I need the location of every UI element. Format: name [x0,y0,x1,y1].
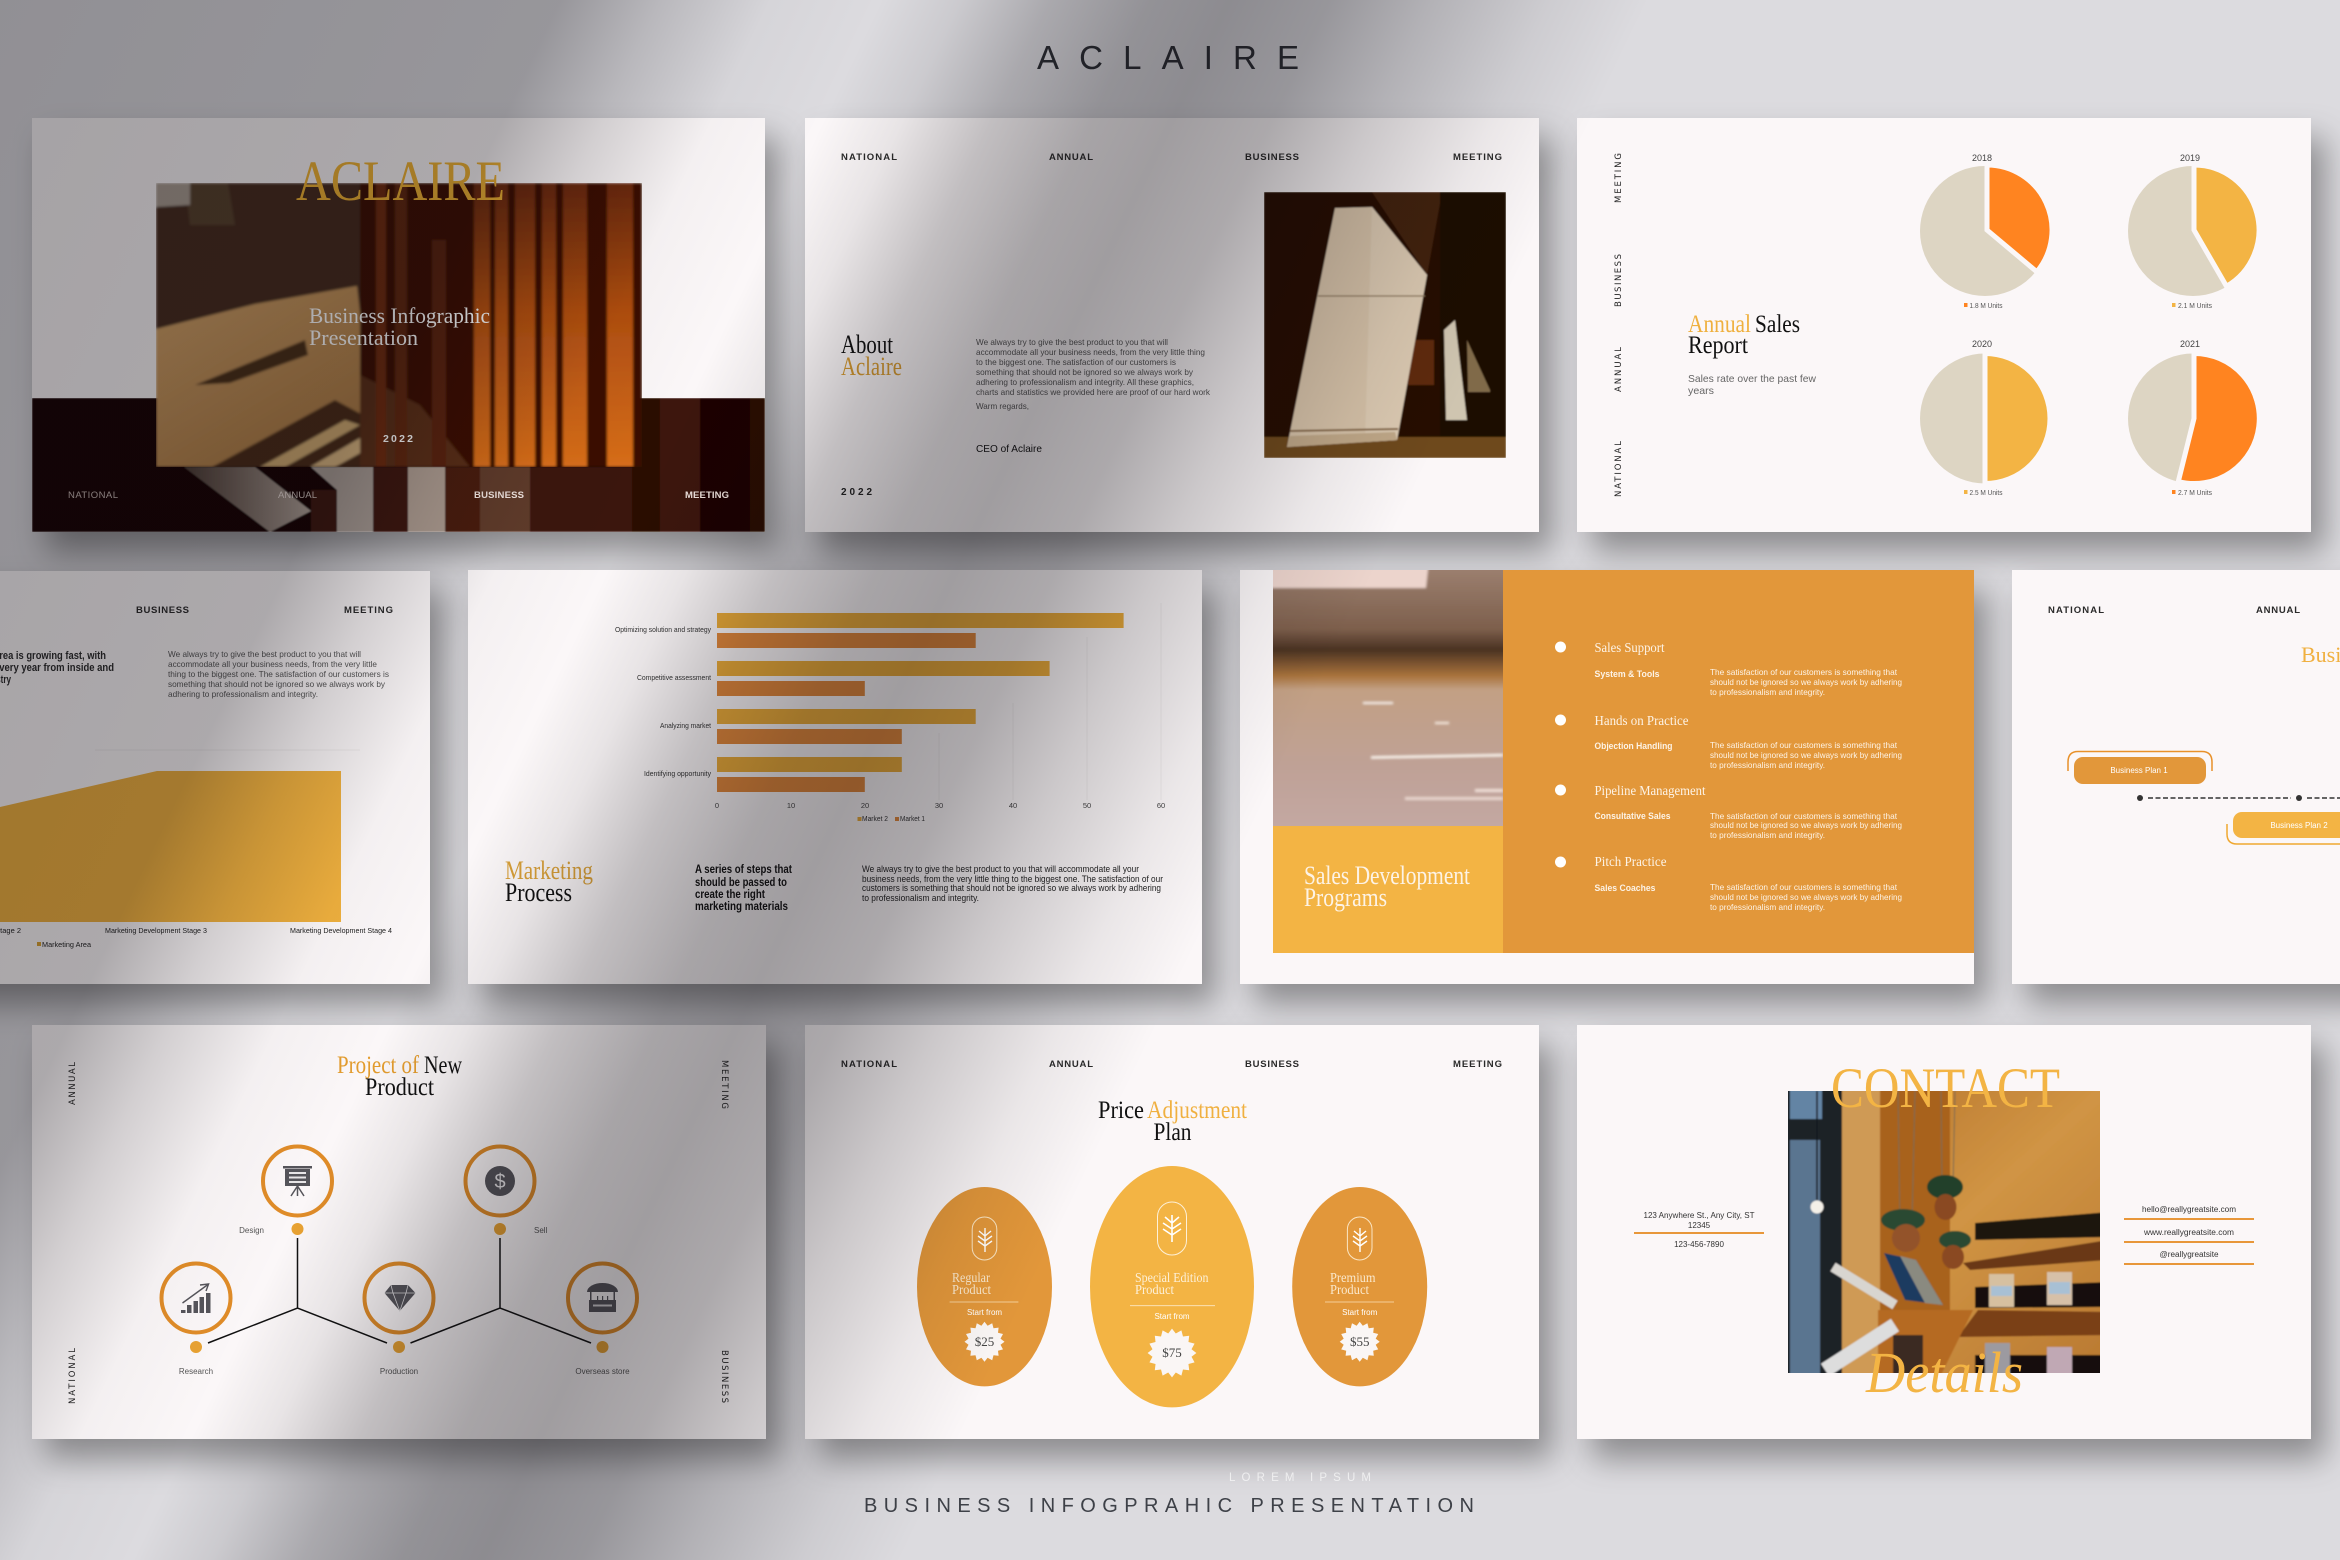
panel: about [805,118,1539,532]
nav labels: NATIONAL [2048,605,2104,616]
signature: CEO of Aclaire [976,443,1042,455]
vertical nav labels: ANNUAL [1614,347,1624,392]
program item 1: should not be ignored so we always work by adhering [1710,677,1902,687]
program item 2: The satisfaction of our customers is something that [1710,740,1898,750]
panel: marketing area chart [0,571,430,984]
price card: premium: Product [1330,1283,1369,1298]
process lead text [695,862,792,913]
vertical nav labels: NATIONAL [68,1348,78,1404]
process lead text: should be passed to [695,875,787,889]
nav labels: BUSINESS [136,605,189,616]
nav labels: BUSINESS [1245,1059,1299,1070]
body text: accommodate all your business needs, from the very little [168,659,377,669]
nav labels [841,1059,1502,1070]
contact heading: CONTACT [1831,1057,2060,1120]
program item 1: The satisfaction of our customers is something that [1710,667,1898,677]
panel: price adjustment plan [805,1025,1539,1439]
report description [1688,373,1816,397]
price card: premium: $55 [1350,1334,1369,1349]
nav labels: NATIONAL [841,1059,897,1070]
program item 3: The satisfaction of our customers is something that [1710,811,1898,821]
online contacts: @reallygreatsite [2160,1250,2219,1259]
price card: special edition: Start from [1154,1312,1190,1321]
bar chart: 40 [1009,801,1017,810]
cover nav labels [68,490,729,501]
business plan 1 [2068,752,2212,784]
pie chart 2019: 2.1 M Units [2178,303,2212,310]
panel: business plan timeline [2012,570,2340,984]
program item 1: Sales Support [1594,640,1665,655]
about text: charts and statistics we provided here are proof of our hard work [976,387,1211,397]
process body text: We always try to give the best product to you that will accommodate all your [862,864,1139,875]
bar chart: Analyzing market [660,721,711,730]
nav labels: ANNUAL [2256,605,2300,616]
body text: We always try to give the best product to you that will [168,649,361,659]
step: design: Design [239,1226,264,1235]
price card: special edition: $75 [1162,1345,1182,1360]
online contacts: www.reallygreatsite.com [2143,1228,2234,1237]
online contacts [2124,1205,2254,1265]
body text: thing to the biggest one. The satisfaction of our customers is [168,669,389,679]
pie chart 2018 [1920,153,2052,310]
details heading: Details [1865,1340,2023,1405]
bar chart: 0 [715,801,719,810]
about text: adhering to professionalism and integrity. All these graphics, [976,377,1194,387]
report heading: Annual [1688,311,1751,338]
yellow title block [1273,826,1503,953]
step: research: Research [179,1367,213,1376]
process lead text: marketing materials [695,899,788,913]
about text: something that should not be ignored so we always work by [976,367,1194,377]
chart axis labels [0,926,392,935]
price card: regular: $25 [975,1334,994,1349]
step: research [162,1264,230,1376]
program item 2: to professionalism and integrity. [1710,760,1825,770]
pie chart 2021: 2.7 M Units [2178,490,2212,497]
hallway photo [1273,570,1503,826]
body text [168,649,389,699]
programs title: Programs [1304,883,1387,912]
process body text: to professionalism and integrity. [862,893,979,904]
price card: premium: Premium [1330,1271,1376,1286]
address block [1634,1211,1764,1249]
bar chart: 10 [787,801,795,810]
process body text: customers is something that should not be ignored so we always work by adhering [862,883,1161,894]
vertical nav labels: BUSINESS [719,1350,729,1403]
price card: special edition [1090,1166,1254,1407]
bar chart: Market 1 [900,816,925,823]
panel: sales development programs [1240,560,1974,984]
contact photo [1780,1085,2108,1381]
cover nav labels: ANNUAL [278,490,317,501]
project heading: New [424,1052,462,1079]
about text: to the biggest one. The satisfaction of our customers is [976,357,1176,367]
price card: regular: Regular [952,1271,990,1286]
address block: 12345 [1688,1221,1711,1230]
address block: 123 Anywhere St., Any City, ST [1644,1211,1755,1220]
price card: special edition: Product [1135,1283,1174,1298]
nav labels: NATIONAL [841,152,897,163]
about text: accommodate all your business needs, from the very little thing [976,347,1205,357]
cover nav labels: NATIONAL [68,490,118,501]
panel: marketing process [468,570,1202,984]
price heading: Plan [1154,1119,1192,1146]
process heading [505,856,593,907]
pie chart 2019 [2128,153,2259,310]
process lead text: create the right [695,887,765,901]
process body text: business needs, from the very little thing to the biggest one. The satisfaction of our [862,874,1163,885]
online contacts: hello@reallygreatsite.com [2142,1205,2236,1214]
program item 4: Sales Coaches [1594,883,1656,894]
area chart [0,771,341,922]
body text: something that should not be ignored so we always work by [168,679,386,689]
bar chart: 50 [1083,801,1091,810]
programs title: Sales Development [1304,861,1471,890]
connector lines [208,1238,591,1343]
icon: leaf [1353,1228,1367,1252]
intro text [0,650,114,686]
nav labels: ANNUAL [1049,152,1093,163]
icon: leaf [978,1228,992,1252]
bar chart: 60 [1157,801,1165,810]
process body text [862,864,1163,904]
about heading: About [841,330,894,359]
price card: special edition: Special Edition [1135,1271,1208,1286]
report heading: Report [1688,332,1748,359]
vertical nav labels: BUSINESS [1614,254,1624,307]
bar chart: 30 [935,801,943,810]
bar chart: 20 [861,801,869,810]
about text [976,337,1211,411]
lorem ipsum caption: LOREM IPSUM [1229,1472,1371,1484]
title: ACLAIRE [1037,39,1299,76]
bar chart: Competitive assessment [637,673,711,682]
program item 2: Hands on Practice [1594,713,1689,728]
price heading [1098,1097,1247,1146]
about photo [1264,192,1506,458]
nav labels [136,605,393,616]
process heading: Process [505,878,572,907]
cover subtitle: Presentation [309,325,418,350]
chart axis labels: Marketing Development Stage 3 [105,926,207,935]
icon: presentation board [283,1166,312,1196]
program item 4 [1555,854,1902,912]
business plan 2 [2227,812,2340,844]
project heading [337,1052,462,1101]
footer subtitle: BUSINESS INFOGPRAHIC PRESENTATION [864,1495,1474,1517]
about heading [841,330,902,381]
step: production [364,1264,434,1376]
orange content block [1503,570,1974,953]
program item 3: Pipeline Management [1594,783,1706,798]
program item 3 [1555,783,1902,840]
nav labels [841,152,1502,163]
cover nav labels: MEETING [685,490,729,501]
cover heading: ACLAIRE [296,150,505,213]
cover subtitle [309,303,490,350]
bottom photo strip [32,398,765,532]
nav labels: BUSINESS [1245,152,1299,163]
about heading: Aclaire [841,352,902,381]
program item 3: to professionalism and integrity. [1710,830,1825,840]
programs title [1304,861,1471,912]
step: overseas store: Overseas store [575,1367,630,1376]
timeline connector [2137,795,2340,801]
chart axis labels: Marketing Development Stage 4 [290,926,392,935]
program item 1: to professionalism and integrity. [1710,687,1825,697]
panel: project of new product [32,1025,766,1439]
about text: Warm regards, [976,401,1029,411]
price card: regular [917,1187,1052,1386]
program item 1 [1555,640,1902,697]
pie chart 2018: 2018 [1972,153,1992,163]
bar chart: Identifying opportunity [644,769,711,778]
program item 4: should not be ignored so we always work by adhering [1710,892,1902,902]
pie chart 2021: 2021 [2180,339,2200,349]
panel: contact details [1577,1025,2311,1439]
cover year: 2022 [383,433,413,445]
program item 4: Pitch Practice [1594,854,1666,869]
cover subtitle: Business Infographic [309,303,490,328]
pie chart 2019: 2019 [2180,153,2200,163]
address block: 123-456-7890 [1674,1240,1724,1249]
price card: regular: Start from [967,1308,1002,1317]
vertical nav labels: MEETING [719,1060,729,1109]
price heading: Price [1098,1097,1144,1124]
pie chart 2021 [2128,339,2259,497]
bar chart [615,613,1165,823]
program item 4: The satisfaction of our customers is something that [1710,882,1898,892]
price card: regular: Product [952,1283,991,1298]
price heading: Adjustment [1147,1097,1247,1124]
icon: dollar coin: $ [494,1171,506,1193]
pie chart 2020: 2.5 M Units [1970,490,2003,497]
about text: We always try to give the best product to you that will [976,337,1168,347]
icon: leaf [1163,1215,1181,1242]
pie chart 2018: 1.8 M Units [1970,303,2003,310]
year: 2022 [841,487,872,498]
body text: adhering to professionalism and integrity. [168,689,318,699]
vertical nav labels: ANNUAL [68,1062,78,1105]
nav labels: MEETING [344,605,393,616]
program item 2: Objection Handling [1594,741,1673,752]
report description: years [1688,385,1714,397]
program item 3: Consultative Sales [1594,811,1670,822]
step: design [239,1146,332,1235]
step: production: Production [380,1367,418,1376]
vertical nav labels [1614,153,1624,497]
nav labels: MEETING [1453,1059,1502,1070]
step: overseas store [568,1264,637,1376]
program item 1: System & Tools [1594,669,1660,680]
vertical nav labels: NATIONAL [1614,441,1624,497]
price card: premium [1292,1187,1427,1386]
program item 3: should not be ignored so we always work by adhering [1710,820,1902,830]
pie chart 2020 [1920,339,2050,497]
nav labels: ANNUAL [1049,1059,1093,1070]
pie chart 2020: 2020 [1972,339,1992,349]
report description: Sales rate over the past few [1688,373,1816,385]
panel: cover slide [32,118,765,532]
bar chart: Market 2 [862,816,888,823]
program item 4: to professionalism and integrity. [1710,902,1825,912]
business plan 1: Business Plan 1 [2110,766,2168,775]
bar chart: Optimizing solution and strategy [615,625,711,634]
cover photo [156,183,642,467]
program item 2: should not be ignored so we always work by adhering [1710,750,1902,760]
project heading: Product [365,1074,434,1101]
process lead text: A series of steps that [695,862,792,876]
process heading: Marketing [505,856,593,885]
step: sell: Sell [534,1226,548,1235]
vertical nav labels [68,1060,729,1404]
nav labels [2048,605,2300,616]
report heading: Sales [1755,311,1800,338]
chart legend: Marketing Area [42,940,92,949]
panel: annual sales report [1577,118,2311,532]
icon: growth chart [181,1284,210,1313]
business plan 2: Business Plan 2 [2270,821,2328,830]
price card: premium: Start from [1342,1308,1378,1317]
step: sell [466,1146,548,1235]
program item 2 [1555,713,1902,770]
cover nav labels: BUSINESS [474,490,524,501]
vertical nav labels: MEETING [1614,153,1624,203]
icon: diamond [384,1285,416,1311]
report heading [1688,311,1800,359]
icon: market stall [587,1283,618,1312]
project heading: Project of [337,1052,420,1079]
nav labels: MEETING [1453,152,1502,163]
